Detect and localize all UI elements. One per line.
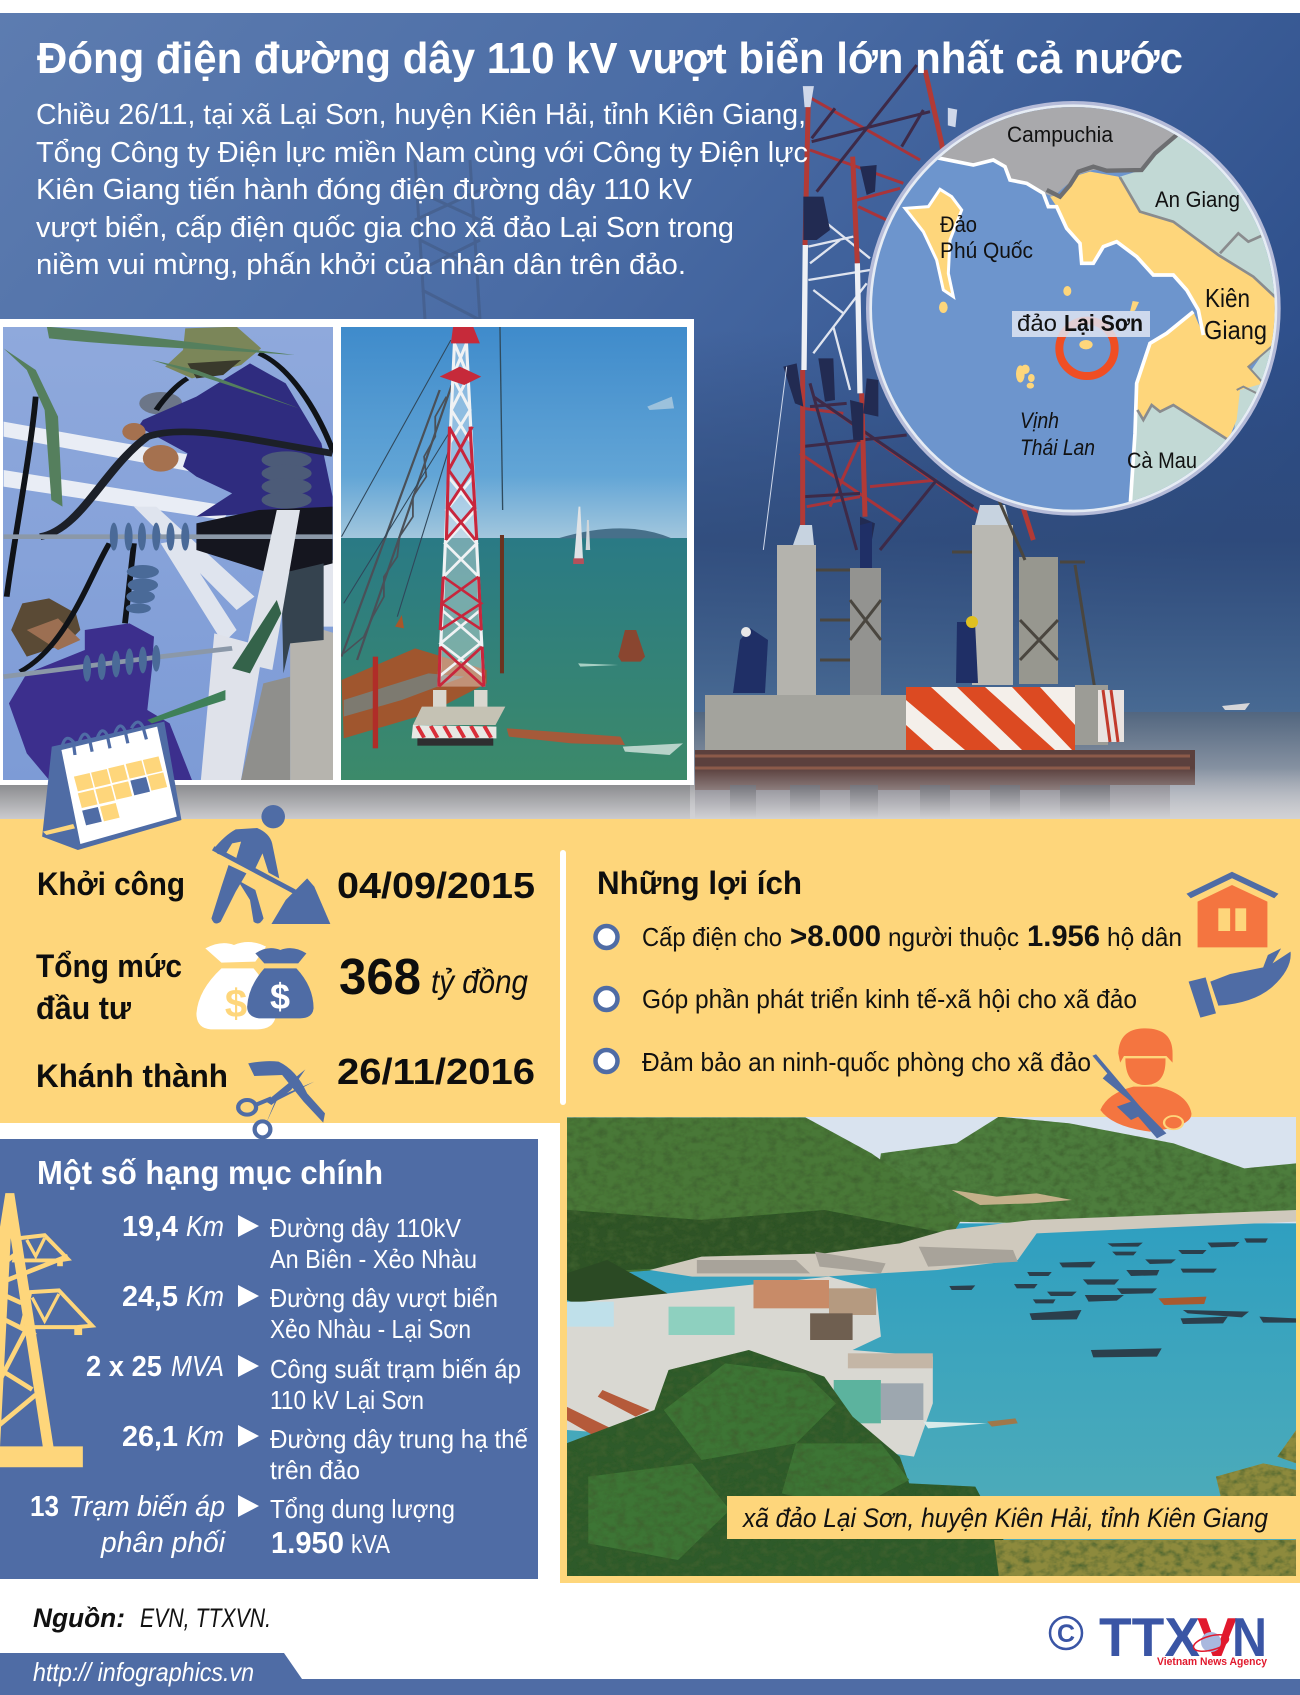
Phu Quoc island	[905, 189, 962, 297]
icon: calendar	[42, 722, 181, 850]
left facts	[36, 865, 535, 1094]
intro paragraph: niềm vui mừng, phấn khởi của nhân dân trên đảo.	[36, 249, 686, 281]
metric values: Trạm biến áp	[69, 1491, 225, 1523]
icon: money bags	[196, 942, 314, 1029]
panel: main work items: Một số hạng mục chính	[37, 1154, 383, 1191]
left facts: đầu tư	[36, 990, 132, 1026]
icon: money bags: $	[225, 982, 247, 1026]
metric values: Km	[186, 1281, 224, 1313]
island photo caption	[727, 1496, 1296, 1539]
item descriptions	[270, 1213, 528, 1560]
crane boom	[341, 340, 452, 660]
map place names: An Giang	[1155, 187, 1240, 212]
panel: benefits: hộ dân	[1107, 922, 1182, 952]
footer bar with website: http:// infographics.vn	[33, 1657, 254, 1687]
logo: TTXVN copyright: Vietnam News Agency	[1157, 1656, 1268, 1668]
intro paragraph: Kiên Giang tiến hành đóng điện đường dây 110 kV	[36, 174, 693, 206]
photo: tower and barges at sea	[341, 327, 687, 780]
item descriptions: 1.950	[271, 1525, 344, 1560]
map place names: Phú Quốc	[940, 238, 1033, 263]
item descriptions: An Biên - Xẻo Nhàu	[270, 1244, 477, 1274]
Lai Son label: đảo	[1017, 310, 1057, 336]
map place names: Đảo	[940, 212, 977, 237]
left facts: tỷ đồng	[431, 963, 529, 1000]
workers on platform	[733, 522, 978, 693]
yellow info band	[0, 819, 1300, 1583]
map place names: Kiên	[1205, 283, 1250, 313]
logo: TTXVN copyright: V	[1197, 1606, 1237, 1668]
map of Kien Giang sea area	[866, 93, 1300, 533]
icon: worker with shovel	[211, 805, 330, 924]
panel: benefits: Góp phần phát triển kinh tế-xã hội cho xã đảo	[642, 984, 1137, 1014]
hero background: sky and sea	[0, 13, 1300, 819]
map place names: Cà Mau	[1127, 448, 1197, 473]
panel: benefits	[596, 865, 1182, 1077]
metric values: 2 x 25	[86, 1351, 162, 1383]
panel: benefits: Đảm bảo an ninh-quốc phòng cho xã đảo	[642, 1047, 1091, 1077]
panel: benefits: Những lợi ích	[597, 865, 802, 901]
intro paragraph: Tổng Công ty Điện lực miền Nam cùng với Công ty Điện lực	[36, 137, 808, 169]
island photo	[567, 1117, 1298, 1577]
icon: ribbon and scissors	[238, 1061, 325, 1137]
icon: soldier with rifle	[1094, 1028, 1191, 1138]
item descriptions: Đường dây vượt biển	[270, 1283, 498, 1313]
photo: electrical workers on pole	[3, 327, 335, 780]
intro paragraph	[36, 99, 808, 281]
metric values: 24,5	[122, 1281, 178, 1313]
left facts: Khởi công	[37, 866, 185, 902]
map place names: Campuchia	[1007, 122, 1114, 147]
map place names	[940, 122, 1267, 473]
item descriptions: trên đảo	[270, 1455, 360, 1485]
metric values: MVA	[171, 1351, 224, 1383]
logo: TTXVN copyright	[1050, 1606, 1268, 1668]
metric values: Km	[186, 1421, 224, 1453]
photo frame	[0, 319, 694, 785]
metric values	[30, 1211, 227, 1559]
logo: TTXVN copyright: N	[1232, 1606, 1267, 1668]
Lai Son label	[1012, 310, 1150, 337]
item descriptions: Xẻo Nhàu - Lại Sơn	[270, 1314, 471, 1344]
concrete columns	[777, 480, 1095, 695]
source: Nguồn:	[33, 1603, 125, 1633]
icon: money bags: $	[270, 976, 290, 1017]
arrows	[238, 1215, 259, 1517]
Lai Son label: Lại Sơn	[1064, 310, 1143, 336]
source	[33, 1603, 271, 1633]
item descriptions: Tổng dung lượng	[270, 1494, 455, 1524]
panel: benefits: Cấp điện cho	[642, 922, 782, 952]
panel: benefits: >8.000	[790, 920, 881, 953]
logo: TTXVN copyright: TTX	[1099, 1606, 1200, 1668]
metric values: 26,1	[122, 1421, 178, 1453]
metric values: 13	[30, 1491, 59, 1523]
left facts: Tổng mức	[36, 948, 182, 984]
intro paragraph: Chiều 26/11, tại xã Lại Sơn, huyện Kiên Hải, tỉnh Kiên Giang,	[36, 99, 806, 131]
left facts: 368	[339, 948, 421, 1005]
left facts: Khánh thành	[36, 1058, 228, 1094]
panel: main work items	[0, 1139, 538, 1579]
item descriptions: 110 kV Lại Sơn	[270, 1385, 424, 1415]
map place names: Thái Lan	[1020, 435, 1095, 460]
map place names: Giang	[1204, 315, 1267, 345]
metric values: Km	[186, 1211, 224, 1243]
icon: transmission pylon	[0, 1193, 92, 1467]
icon: house in hand	[1189, 875, 1291, 1018]
metric values: 19,4	[122, 1211, 178, 1243]
left facts: 04/09/2015	[337, 865, 535, 906]
panel: benefits: người thuộc	[888, 922, 1019, 952]
source: EVN, TTXVN.	[140, 1603, 271, 1633]
item descriptions: Đường dây trung hạ thế	[270, 1424, 528, 1454]
concrete base with warning stripes	[695, 685, 1250, 819]
footer bar with website	[0, 1653, 1300, 1695]
title: Đóng điện đường dây 110 kV vượt biển lớn nhất cả nước	[37, 34, 1183, 83]
metric values: phân phối	[100, 1527, 227, 1559]
Lai Son marker ring	[1059, 321, 1115, 376]
background photo: transmission tower on sea platform	[415, 65, 1300, 819]
item descriptions: Công suất trạm biến áp	[270, 1354, 521, 1384]
intro paragraph: vượt biển, cấp điện quốc gia cho xã đảo Lại Sơn trong	[36, 212, 734, 244]
item descriptions: kVA	[351, 1529, 391, 1559]
lattice tower	[439, 343, 484, 687]
left facts: 26/11/2016	[337, 1051, 535, 1092]
map place names: Vịnh	[1020, 408, 1059, 433]
item descriptions: Đường dây 110kV	[270, 1213, 462, 1243]
logo: TTXVN copyright: C	[1057, 1620, 1075, 1648]
panel: benefits: 1.956	[1027, 920, 1100, 953]
